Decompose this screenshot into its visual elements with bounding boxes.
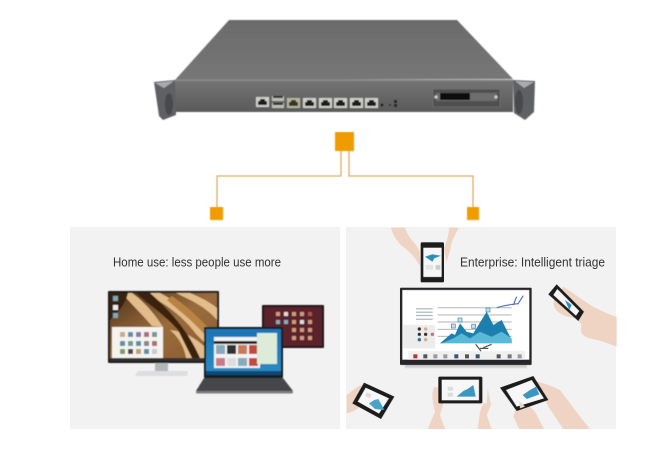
home panel background bbox=[70, 227, 340, 429]
right rack ear bbox=[513, 80, 535, 120]
monitor bbox=[108, 291, 219, 363]
connector diagram bbox=[210, 132, 479, 220]
hands holding top phone bbox=[391, 228, 459, 267]
front panel top edge bbox=[175, 80, 513, 81]
drive bay bbox=[433, 89, 500, 107]
devices illustration bbox=[108, 291, 324, 394]
collaboration illustration bbox=[347, 228, 617, 429]
top orange node bbox=[335, 132, 354, 151]
six network ports bbox=[287, 98, 378, 108]
server top cover bbox=[175, 20, 513, 80]
bottom right hands and tablet bbox=[500, 376, 590, 429]
monitor stand bbox=[135, 363, 188, 376]
right hand and phone bbox=[548, 284, 617, 347]
enterprise heading: Enterprise: Intelligent triage bbox=[460, 254, 605, 270]
left orange node bbox=[210, 207, 223, 220]
bottom left hand and tablet bbox=[347, 383, 394, 419]
connector lines bbox=[217, 151, 473, 207]
bottom center hands and tablet bbox=[428, 377, 492, 429]
home use heading: Home use: less people use more bbox=[113, 254, 281, 270]
enterprise panel background bbox=[346, 227, 616, 429]
server appliance bbox=[154, 20, 535, 120]
status LEDs bbox=[380, 100, 397, 107]
right orange node bbox=[467, 207, 479, 220]
tablet bbox=[262, 305, 324, 348]
display shadow bbox=[405, 363, 527, 368]
panel: enterprise bbox=[346, 227, 617, 429]
left rack ear bbox=[154, 80, 176, 120]
console port bbox=[256, 97, 269, 107]
main display bbox=[400, 288, 532, 365]
laptop bbox=[196, 327, 293, 394]
USB ports bbox=[272, 96, 284, 108]
panel: home use bbox=[70, 227, 340, 429]
top phone bbox=[421, 242, 444, 282]
server front panel bbox=[175, 80, 513, 112]
